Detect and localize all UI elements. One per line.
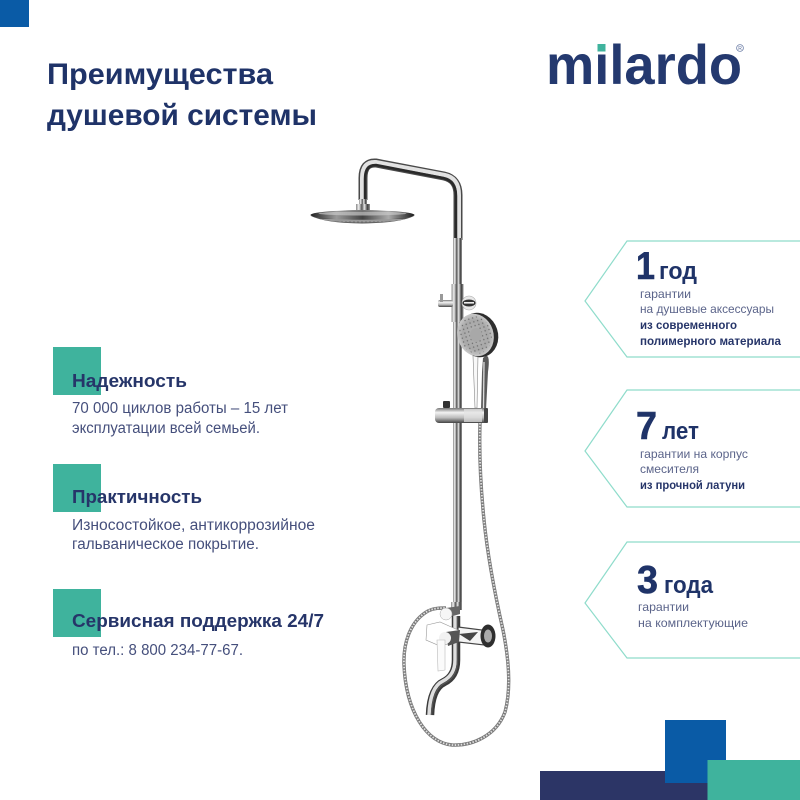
- logo: milardo: R: [738, 46, 742, 52]
- warranty panel: 1 year: полимерного материала: [640, 334, 781, 348]
- slider bar: [435, 401, 488, 423]
- logo: milardo: milardo: [546, 33, 742, 96]
- warranty panel: 3 years: года: [664, 572, 714, 599]
- hand shower: [452, 308, 504, 410]
- warranty panel: 7 years: гарантии на корпус: [640, 447, 748, 461]
- decorative blue corner square: [0, 0, 29, 27]
- wall bracket: [438, 294, 476, 310]
- warranty panel: 7 years: лет: [662, 418, 699, 445]
- warranty panel: 1 year: год: [659, 258, 697, 285]
- title: душевой системы: [47, 99, 317, 132]
- warranty panel: 3 years: 3: [637, 559, 658, 602]
- warranty panel: 3 years: гарантии: [638, 600, 689, 614]
- benefit: service support: [53, 589, 324, 659]
- warranty panel: 1 year: на душевые аксессуары: [640, 302, 774, 316]
- benefit: reliability: 70 000 циклов работы – 15 лет: [72, 400, 288, 417]
- warranty panel: 1 year: гарантии: [640, 287, 691, 301]
- warranty panel: 1 year: из современного: [640, 318, 737, 332]
- benefit: service support: Сервисная поддержка 24/7: [72, 610, 324, 631]
- title: [47, 58, 317, 132]
- warranty panel: 1 year: 1: [636, 245, 655, 288]
- overhead arm: [362, 162, 459, 240]
- mixer body and lever: [426, 622, 496, 671]
- benefit: reliability: [53, 347, 288, 437]
- warranty panel: 7 years: смесителя: [640, 462, 699, 476]
- benefit: practicality: [53, 464, 315, 553]
- decorative blocks bottom right: [540, 720, 800, 800]
- spout: [429, 616, 458, 715]
- benefit: practicality: Износостойкое, антикоррозийное: [72, 517, 315, 534]
- warranty panel: 7 years: из прочной латуни: [640, 478, 745, 492]
- warranty panel: 1 year: [585, 241, 800, 357]
- sliding rail: [453, 238, 462, 607]
- title: Преимущества: [47, 58, 273, 91]
- shower system: [310, 162, 509, 745]
- overhead shower head: [310, 199, 414, 224]
- hose: [404, 423, 509, 745]
- diverter: [440, 602, 462, 620]
- benefit: service support: по тел.: 8 800 234-77-67.: [72, 642, 243, 659]
- warranty panel: 7 years: [585, 390, 800, 507]
- benefit: practicality: гальваническое покрытие.: [72, 536, 259, 553]
- benefit: reliability: Надежность: [72, 370, 187, 391]
- benefit: reliability: эксплуатации всей семьей.: [72, 420, 260, 437]
- warranty panel: 3 years: на комплектующие: [638, 616, 748, 630]
- warranty panel: 3 years: [585, 542, 800, 658]
- benefit: practicality: Практичность: [72, 486, 202, 507]
- warranty panel: 7 years: 7: [636, 405, 657, 448]
